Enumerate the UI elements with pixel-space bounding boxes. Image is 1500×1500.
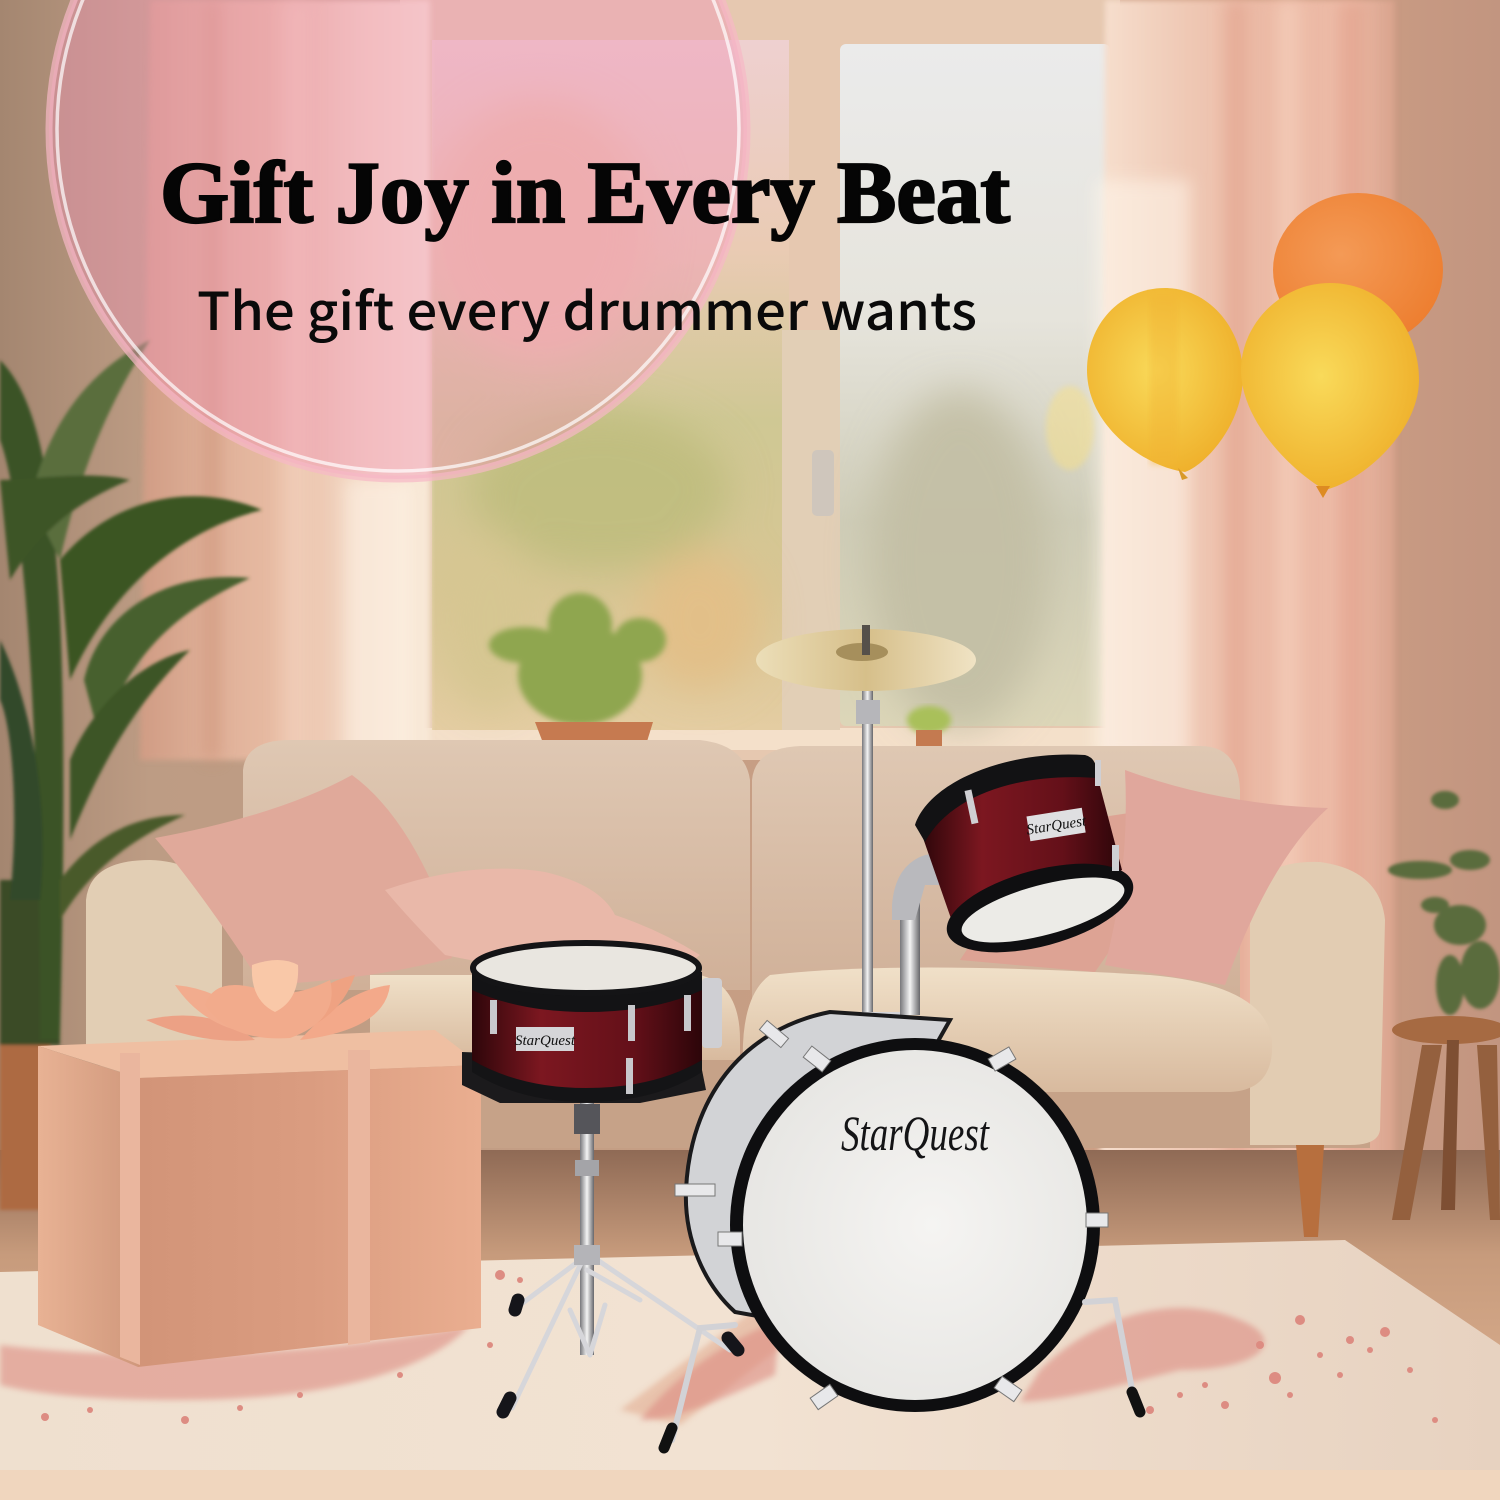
pillow right large: [1105, 770, 1328, 985]
sofa back left cushion: [243, 740, 750, 990]
cymbal: [756, 625, 976, 691]
badge: StarQuest: [1025, 813, 1088, 839]
rug: [0, 1240, 1500, 1470]
balloon yellow left: [1087, 288, 1243, 480]
cymbal stand: [840, 650, 930, 1044]
pillow left large: [155, 775, 452, 985]
snare stand: [503, 1100, 738, 1412]
sofa base: [100, 1060, 1370, 1148]
curtain right: [1095, 0, 1395, 1185]
window handle: [812, 450, 834, 516]
floor: [0, 1150, 1500, 1500]
garden foliage blur: [430, 100, 1050, 730]
bass drum logo: StarQuest: [841, 1105, 990, 1161]
balloon orange: [1273, 193, 1443, 347]
bass drum: [664, 1012, 1140, 1448]
sofa back right cushion: [752, 746, 1240, 1000]
box top: [38, 1030, 481, 1078]
badge: [515, 1027, 576, 1051]
seat cushion right: [743, 968, 1272, 1092]
tom drum: [915, 754, 1143, 970]
pillow right small: [960, 805, 1182, 972]
window: [400, 0, 1120, 760]
box front: [138, 1065, 481, 1367]
title: Gift Joy in Every Beat: [160, 145, 1010, 242]
petals on rug: [0, 1270, 1438, 1424]
pillow left small: [385, 869, 700, 985]
windowsill plant: [489, 593, 666, 748]
sofa right arm: [1250, 862, 1385, 1145]
sofa leg: [1296, 1145, 1324, 1237]
tom holder: [892, 850, 960, 1015]
plant left: [0, 340, 262, 1210]
gift box: [38, 960, 481, 1367]
balloons: [1046, 193, 1443, 498]
plant right with stool: [1388, 791, 1500, 1220]
pink circle badge: [49, 0, 747, 479]
badge: StarQuest: [515, 1033, 576, 1049]
box left side: [38, 1046, 138, 1367]
small sill plant: [907, 706, 951, 750]
balloon yellow right: [1241, 283, 1419, 498]
seat cushion left: [370, 975, 740, 1060]
subtitle: The gift every drummer wants: [197, 270, 977, 345]
sofa: [86, 740, 1385, 1237]
ribbons: [120, 1050, 370, 1365]
bow: [146, 960, 390, 1041]
curtain left: [140, 0, 430, 760]
lugs: [675, 1020, 1108, 1410]
snare drum: [462, 943, 722, 1103]
bass drum legs: [672, 1300, 1135, 1440]
sofa left arm: [86, 860, 222, 1045]
